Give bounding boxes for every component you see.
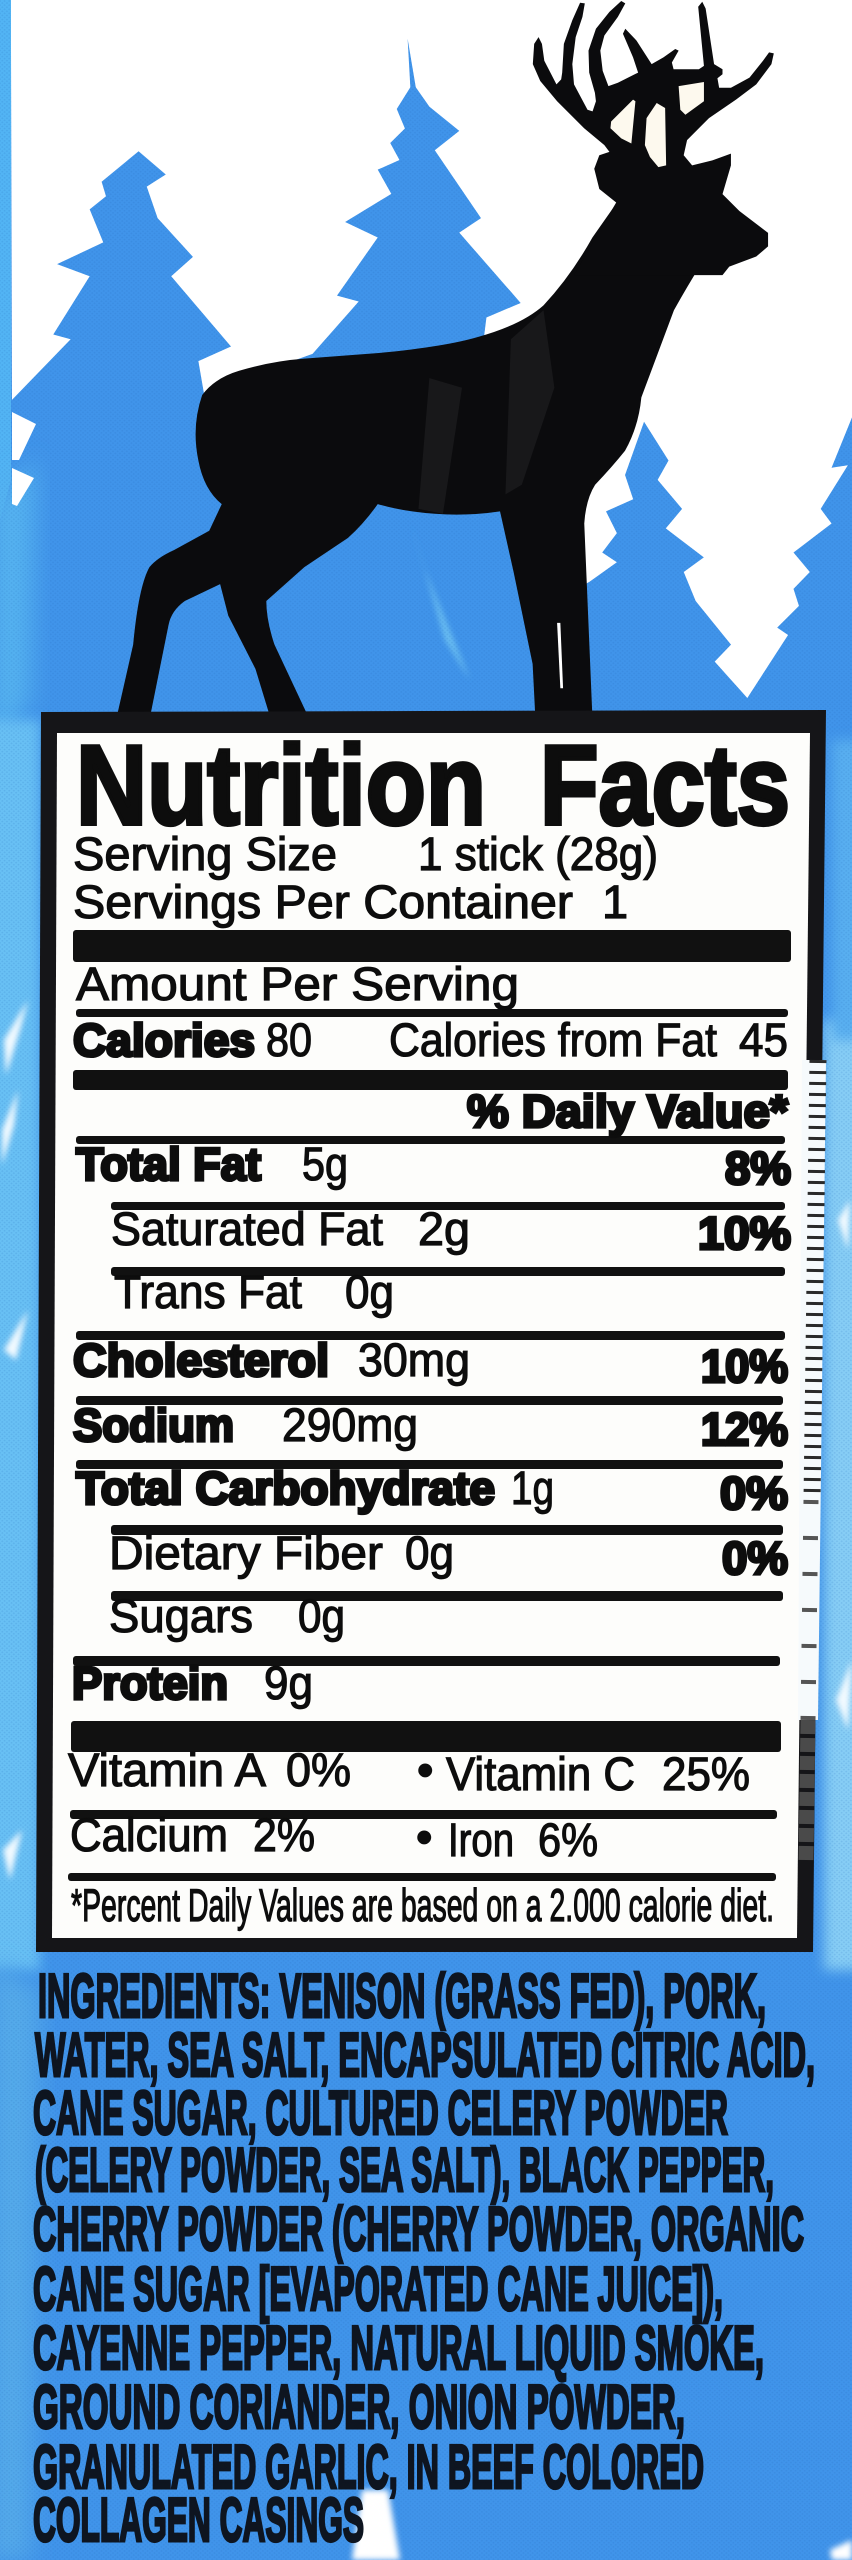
minerals row (70, 1808, 598, 1866)
thick divider bars and rules (68, 930, 791, 1881)
vitamins row: Vitamin A (68, 1743, 267, 1796)
calories row (73, 1013, 788, 1066)
serving information: Servings Per Container (73, 875, 573, 928)
panel white interior (52, 733, 810, 1938)
deer leg slit (557, 623, 563, 688)
vitamins row: 0% (286, 1743, 351, 1796)
saturated fat row: 2g (418, 1202, 470, 1255)
protein row: Protein (72, 1657, 228, 1709)
total fat row: 5g (302, 1137, 348, 1190)
cholesterol row (73, 1333, 788, 1392)
dietary fiber row: Dietary Fiber (109, 1526, 383, 1579)
panel border (36, 710, 826, 1952)
vitamins row: • (417, 1743, 433, 1796)
dietary fiber row: 0g (405, 1526, 454, 1579)
serving information: 1 stick (28g) (418, 827, 658, 880)
minerals row: 6% (538, 1813, 598, 1866)
serving information: 1 (602, 875, 628, 928)
deer head and antlers (533, 1, 774, 275)
trans fat row: Trans Fat (114, 1265, 302, 1318)
heading: Nutrition Facts: Facts (540, 722, 790, 848)
vitamins row: Vitamin C (446, 1747, 635, 1800)
deer antler gaps (610, 82, 704, 167)
sugars row: Sugars (109, 1589, 253, 1642)
serving information (73, 827, 658, 928)
saturated fat row: Saturated Fat (111, 1202, 383, 1255)
cholesterol row: 10% (701, 1340, 788, 1392)
total carbohydrate row: 1g (511, 1461, 554, 1514)
heading: Nutrition Facts: Nutrition (76, 722, 486, 848)
daily value header: % Daily Value* (467, 1085, 788, 1137)
total carbohydrate row (76, 1461, 788, 1519)
deer body (117, 199, 707, 722)
dietary fiber row: 0% (722, 1532, 788, 1584)
total fat row: Total Fat (76, 1138, 261, 1190)
panel worn right edge (798, 1060, 826, 1860)
saturated fat row (111, 1202, 791, 1259)
protein row: 9g (264, 1656, 313, 1709)
total fat row: 8% (725, 1142, 791, 1194)
deer sheen highlights (418, 310, 554, 514)
heading: Nutrition Facts (76, 722, 790, 848)
calories row: 80 (266, 1013, 312, 1066)
minerals row: 2% (253, 1808, 315, 1861)
sodium row: Sodium (73, 1399, 234, 1451)
trans fat row: 0g (345, 1265, 394, 1318)
cholesterol row: 30mg (358, 1333, 470, 1386)
protein row (72, 1656, 313, 1709)
panel: nutrition facts label (36, 710, 826, 1952)
saturated fat row: 10% (698, 1207, 791, 1259)
serving information: Serving Size (73, 827, 337, 880)
total fat row (76, 1137, 791, 1194)
total carbohydrate row: Total Carbohydrate (76, 1462, 495, 1514)
minerals row: Iron (448, 1813, 514, 1866)
total carbohydrate row: 0% (720, 1467, 788, 1519)
sugars row: 0g (298, 1589, 345, 1642)
ingredients text block (33, 1962, 815, 2555)
cholesterol row: Cholesterol (73, 1334, 329, 1386)
ingredients text block: COLLAGEN CASINGS (33, 2486, 364, 2555)
calories row: Calories from Fat (389, 1013, 717, 1066)
calories row: Calories (73, 1014, 255, 1066)
minerals row: Calcium (70, 1808, 228, 1861)
minerals row: • (416, 1810, 432, 1863)
amount per serving: Amount Per Serving (76, 957, 519, 1010)
sodium row (73, 1398, 788, 1455)
sugars row (109, 1589, 345, 1642)
icon: deer silhouette (117, 1, 774, 722)
dietary fiber row (109, 1526, 788, 1584)
calories row: 45 (739, 1013, 788, 1066)
sodium row: 12% (701, 1403, 788, 1455)
sodium row: 290mg (282, 1398, 418, 1451)
vitamins row (68, 1743, 750, 1800)
vitamins row: 25% (662, 1747, 750, 1800)
